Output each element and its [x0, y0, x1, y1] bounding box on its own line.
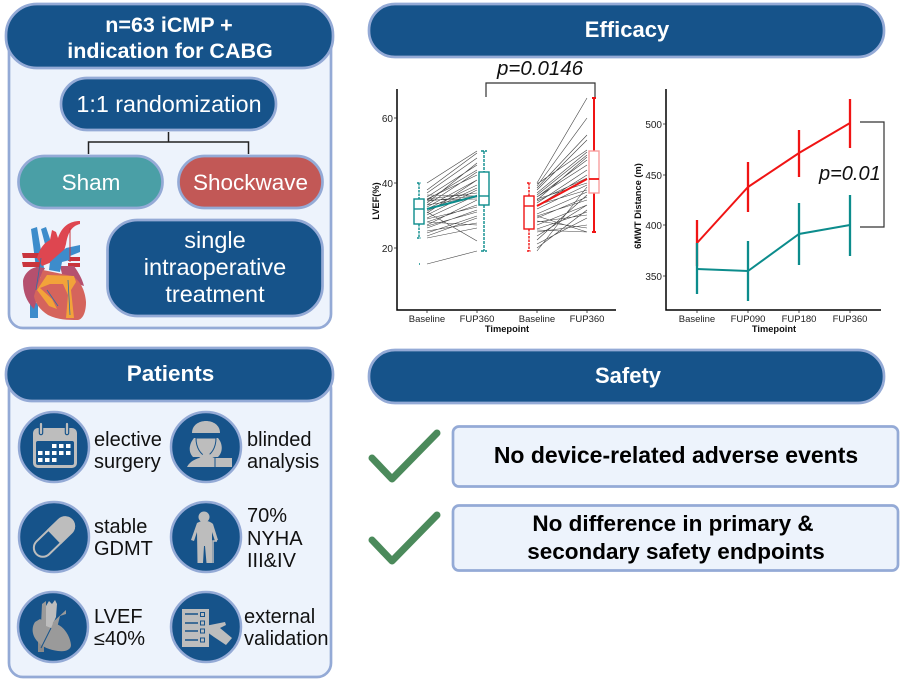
6MWT p-value bracket — [818, 122, 884, 227]
item: blinded analysis: blinded — [247, 429, 312, 451]
6MWT axes — [666, 89, 881, 310]
item: LVEF: LVEF — [94, 606, 143, 628]
item: blinded analysis — [171, 412, 319, 482]
chart: LVEF box plot: Timepoint — [485, 324, 529, 334]
safety result 2: secondary safety endpoints — [527, 539, 825, 564]
safety result 1: No device-related adverse events — [494, 442, 858, 468]
item: LVEF — [18, 592, 145, 662]
panel: patients — [6, 348, 333, 677]
heading: n=63 iCMP: n=63 iCMP + — [105, 13, 233, 37]
sham boxes — [414, 151, 489, 264]
item: stable GDMT — [19, 502, 153, 572]
chart: 6MWT distance: Timepoint — [752, 324, 796, 334]
chart: 6MWT distance: FUP090 — [731, 314, 765, 325]
chart: 6MWT distance: FUP180 — [782, 314, 816, 325]
LVEF paired patient lines — [427, 98, 587, 264]
randomization pill: 1:1 randomization — [76, 91, 262, 117]
panel: trial design — [6, 4, 333, 328]
chart: LVEF box plot — [371, 57, 616, 334]
chart: 6MWT distance — [633, 89, 884, 334]
sham arm: Sham — [62, 170, 120, 195]
heading: patients: Patients — [127, 361, 214, 386]
item: external validation: external — [244, 606, 315, 628]
item: blinded analysis: analysis — [247, 451, 319, 473]
chart: LVEF box plot: 60 — [382, 114, 393, 125]
chart: 6MWT distance: 450 — [645, 171, 662, 182]
safety result 2 — [453, 506, 898, 570]
p-value bracket: p=0.0146 — [496, 57, 584, 80]
sham arm — [18, 156, 162, 208]
shockwave series — [697, 99, 850, 266]
chart: LVEF box plot: FUP360 — [570, 314, 604, 325]
shockwave arm: Shockwave — [193, 170, 308, 195]
treatment box: intraoperative — [144, 254, 286, 280]
item: NYHA class: III&IV — [247, 550, 297, 572]
item: external validation: validation — [244, 628, 329, 650]
icon: check mark 1 — [372, 433, 437, 479]
heading: safety: Safety — [595, 363, 662, 388]
chart: LVEF box plot: 20 — [382, 244, 393, 255]
heading: efficacy: Efficacy — [585, 17, 670, 42]
heading: patients — [6, 348, 333, 401]
chart: LVEF box plot: Baseline — [409, 314, 445, 325]
shockwave arm — [178, 156, 322, 208]
heading: safety — [369, 350, 884, 403]
safety result 1 — [453, 426, 898, 486]
safety result 2: No difference in primary & — [532, 511, 814, 536]
chart: 6MWT distance: 6MWT Distance (m) — [633, 163, 643, 249]
shockwave boxes — [524, 98, 599, 251]
chart: 6MWT distance: Baseline — [679, 314, 715, 325]
icon: heart — [22, 221, 86, 320]
6MWT p-value bracket: p=0.01 — [818, 163, 881, 185]
item: NYHA class — [171, 502, 303, 572]
randomization tree connector — [88, 132, 248, 154]
item: stable GDMT: GDMT — [94, 538, 153, 560]
chart: 6MWT distance: 350 — [645, 272, 662, 283]
randomization pill — [61, 78, 276, 130]
sham series — [697, 195, 850, 301]
chart: 6MWT distance: 400 — [645, 221, 662, 232]
LVEF axes — [397, 89, 616, 310]
p-value bracket — [486, 57, 595, 97]
heading: n=63 iCMP — [6, 4, 333, 68]
heading: efficacy — [369, 4, 884, 57]
item: elective surgery: elective — [94, 429, 162, 451]
treatment box: treatment — [165, 281, 265, 307]
chart: 6MWT distance: 500 — [645, 120, 662, 131]
chart: LVEF box plot: 40 — [382, 179, 393, 190]
item: elective surgery — [19, 412, 162, 482]
chart: LVEF box plot: Baseline — [519, 314, 555, 325]
treatment box — [108, 220, 322, 316]
item: LVEF: ≤40% — [94, 628, 145, 650]
item: elective surgery: surgery — [94, 451, 161, 473]
item: stable GDMT: stable — [94, 516, 147, 538]
item: NYHA class: 70% — [247, 505, 287, 527]
heading: n=63 iCMP: indication for CABG — [67, 39, 273, 63]
chart: LVEF box plot: FUP360 — [460, 314, 494, 325]
icon: check mark 2 — [372, 515, 437, 561]
item: external validation — [171, 592, 329, 662]
item: NYHA class: NYHA — [247, 528, 303, 550]
chart: 6MWT distance: FUP360 — [833, 314, 867, 325]
treatment box: single — [184, 227, 246, 253]
chart: LVEF box plot: LVEF(%) — [371, 182, 381, 220]
